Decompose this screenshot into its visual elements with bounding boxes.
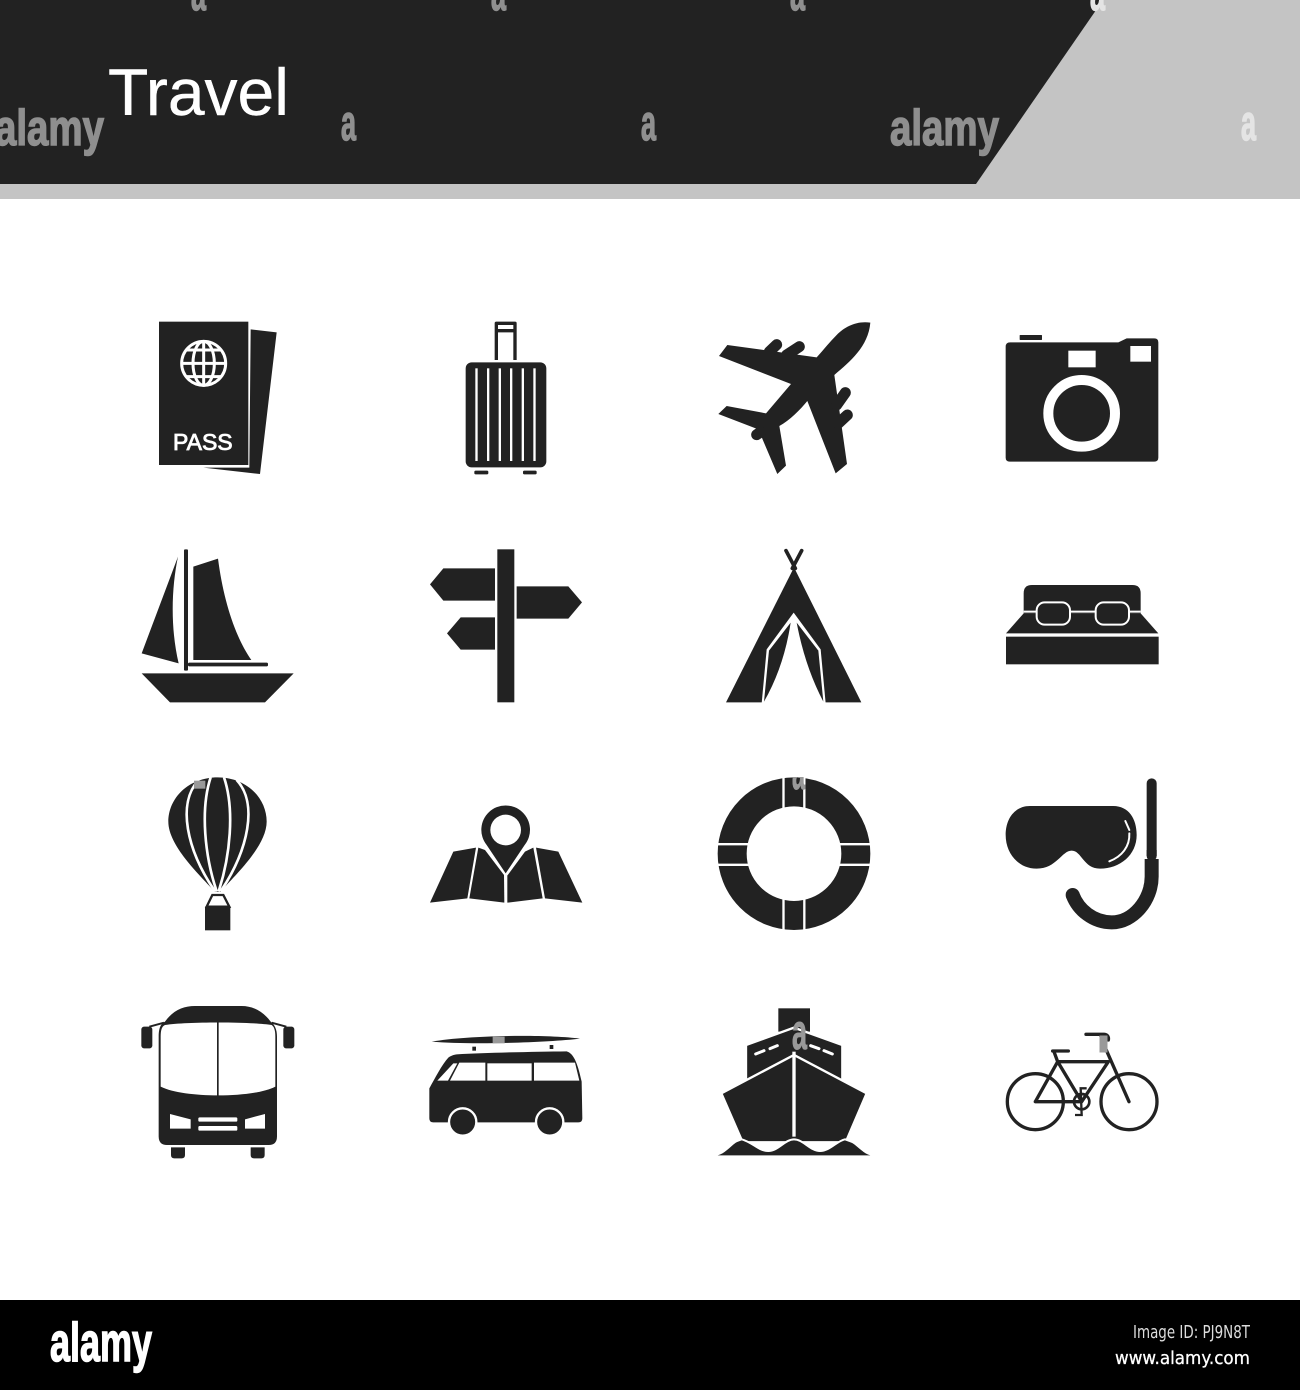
website: www.alamy.com: [1115, 1348, 1250, 1369]
footer logo: alamy: [50, 1311, 152, 1373]
footer bar: [0, 1300, 1300, 1390]
icon: bicycle: [1007, 1034, 1157, 1130]
icon: passport: [159, 322, 277, 474]
icon: passport: PASS: [173, 429, 233, 455]
icon: tent: [726, 551, 861, 703]
icon: camera: [1006, 335, 1158, 462]
icon: signpost: [430, 549, 582, 702]
icon: suitcase: [466, 323, 546, 474]
watermark: header: [0, 0, 1257, 156]
icon: airplane: [718, 322, 870, 474]
icon: map with pin: [430, 805, 582, 903]
image id: Image ID: PJ9N8T: [1133, 1322, 1251, 1343]
icon: life buoy: [717, 776, 871, 931]
header banner: [0, 0, 1300, 199]
watermark: header: a: [341, 95, 357, 151]
icon: snorkel mask: [1006, 783, 1157, 922]
icon: camper van with surfboard: [429, 1036, 582, 1136]
icon: bus: [141, 1006, 294, 1158]
watermark: header: alamy: [890, 100, 999, 156]
watermark: header: a: [1241, 95, 1257, 151]
watermark: header: a: [641, 95, 657, 151]
icon: cruise ship: [718, 1008, 870, 1155]
icon: bed: [1006, 585, 1159, 664]
icon: sailboat: [142, 549, 294, 702]
watermark: icon overlays: a: [792, 1004, 808, 1060]
title: Travel: [108, 55, 289, 129]
icon: hot air balloon: [168, 777, 267, 930]
watermark: icon overlays: [792, 777, 1108, 1052]
watermark: icon overlays: a: [792, 744, 806, 800]
